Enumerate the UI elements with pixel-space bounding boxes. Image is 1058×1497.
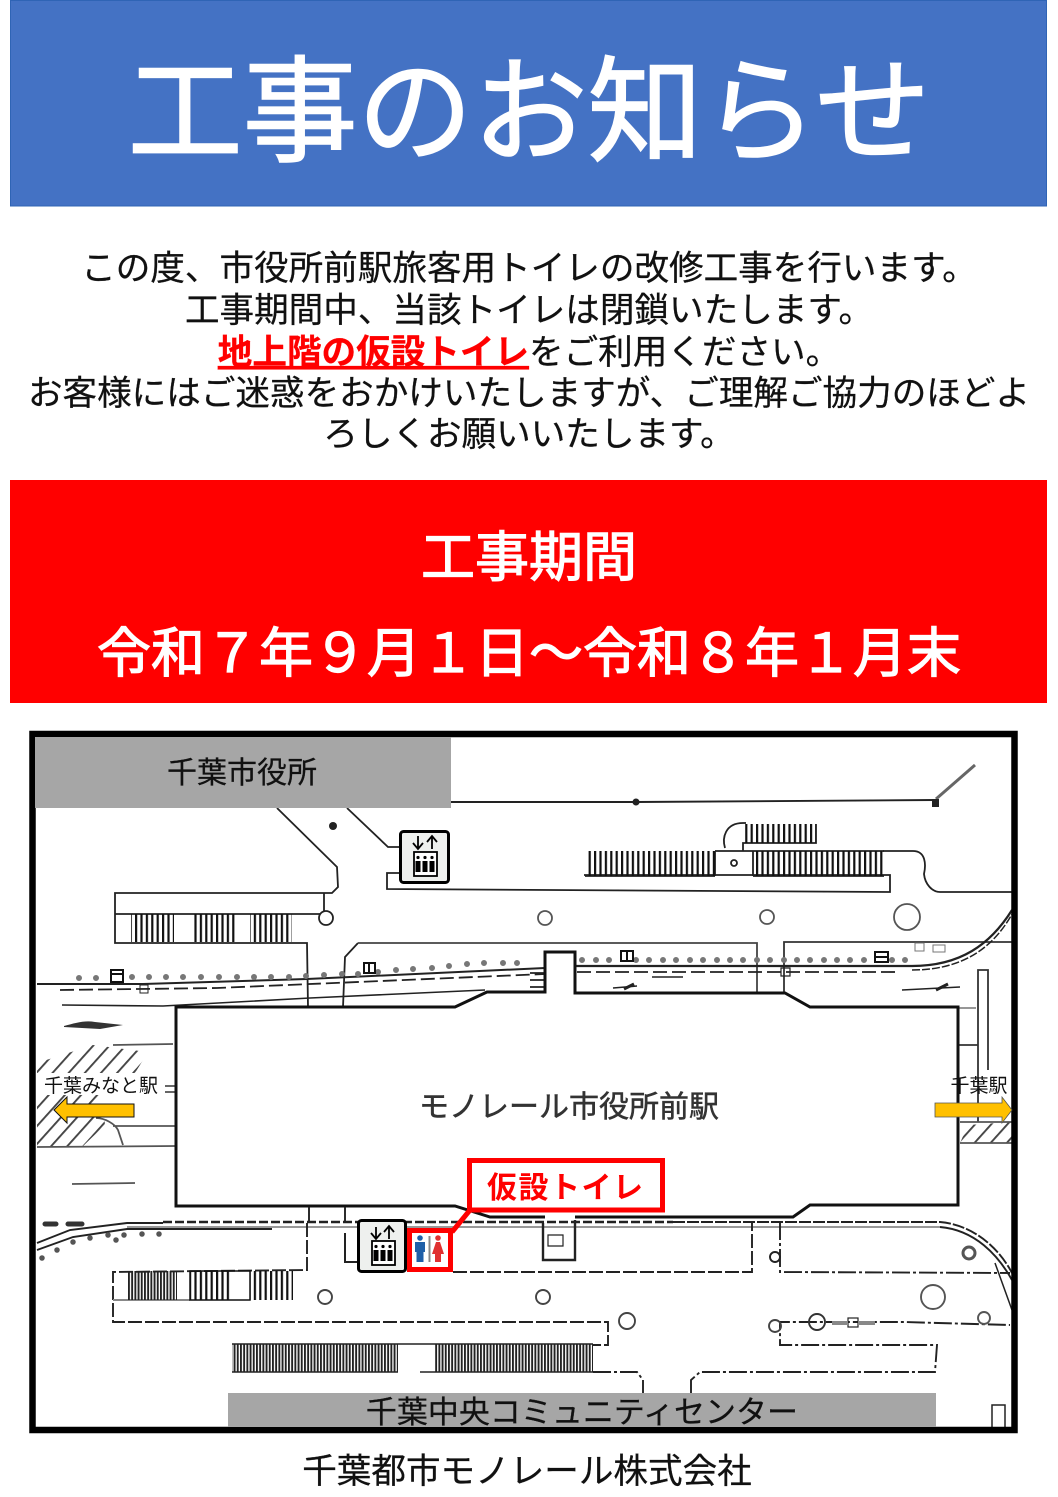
map: south pillar dots xyxy=(42,1234,159,1258)
construction period banner xyxy=(10,480,1047,703)
notice text block: 工事期間中、当該トイレは閉鎖いたします。 xyxy=(185,292,873,330)
notice text block: お客様にはご迷惑をおかけいたしますが、ご理解ご協力のほどよ xyxy=(28,375,1030,413)
icon: elevator north xyxy=(400,832,448,882)
map: north side plan lines xyxy=(115,765,1012,1007)
callout connector xyxy=(452,1210,470,1232)
label: Chiba Chuo Community Center xyxy=(228,1393,936,1430)
map: west hatched area xyxy=(37,1021,1012,1184)
notice text block: ろしくお願いいたします。 xyxy=(323,416,735,454)
map: platform dots xyxy=(79,960,905,978)
notice text block xyxy=(28,250,1030,454)
icon: temporary toilet xyxy=(410,1230,450,1270)
notice text block: 地上階の仮設トイレをご利用ください。 xyxy=(218,334,840,372)
footer: company name: 千葉都市モノレール株式会社 xyxy=(302,1453,752,1491)
arrow: to Chiba xyxy=(935,1097,1012,1123)
label: Chiba station: 千葉駅 xyxy=(950,1075,1008,1097)
map: station building outline xyxy=(176,952,958,1217)
frame border xyxy=(32,734,1014,1430)
map: east side structures xyxy=(915,943,988,1122)
map: small kiosks xyxy=(111,951,888,982)
period dates: 令和７年９月１日～令和８年１月末 xyxy=(97,624,961,684)
notice text block: この度、市役所前駅旅客用トイレの改修工事を行います。 xyxy=(81,250,977,288)
map: north stairs xyxy=(131,824,883,942)
callout: temporary toilet: 仮設トイレ xyxy=(487,1172,643,1205)
label: Chiba City Hall: 千葉市役所 xyxy=(167,757,317,790)
label: Chiba Minato station: 千葉みなと駅 xyxy=(44,1075,158,1097)
title banner xyxy=(10,0,1046,206)
callout: temporary toilet xyxy=(470,1160,662,1210)
map: track and pillars north xyxy=(37,910,1012,1006)
map: south stairs xyxy=(128,1271,593,1372)
label: Chiba Chuo Community Center: 千葉中央コミュニティセンター xyxy=(366,1395,798,1430)
icon: elevator south xyxy=(358,1220,406,1272)
arrow: to Chiba Minato xyxy=(54,1097,134,1123)
title: 工事のお知らせ xyxy=(128,49,930,177)
label: station name: モノレール市役所前駅 xyxy=(419,1091,719,1124)
label: Chiba City Hall xyxy=(35,737,451,808)
map: south side plan lines xyxy=(37,1207,1012,1427)
station map panel xyxy=(32,734,1015,1430)
period heading: 工事期間 xyxy=(421,528,637,588)
